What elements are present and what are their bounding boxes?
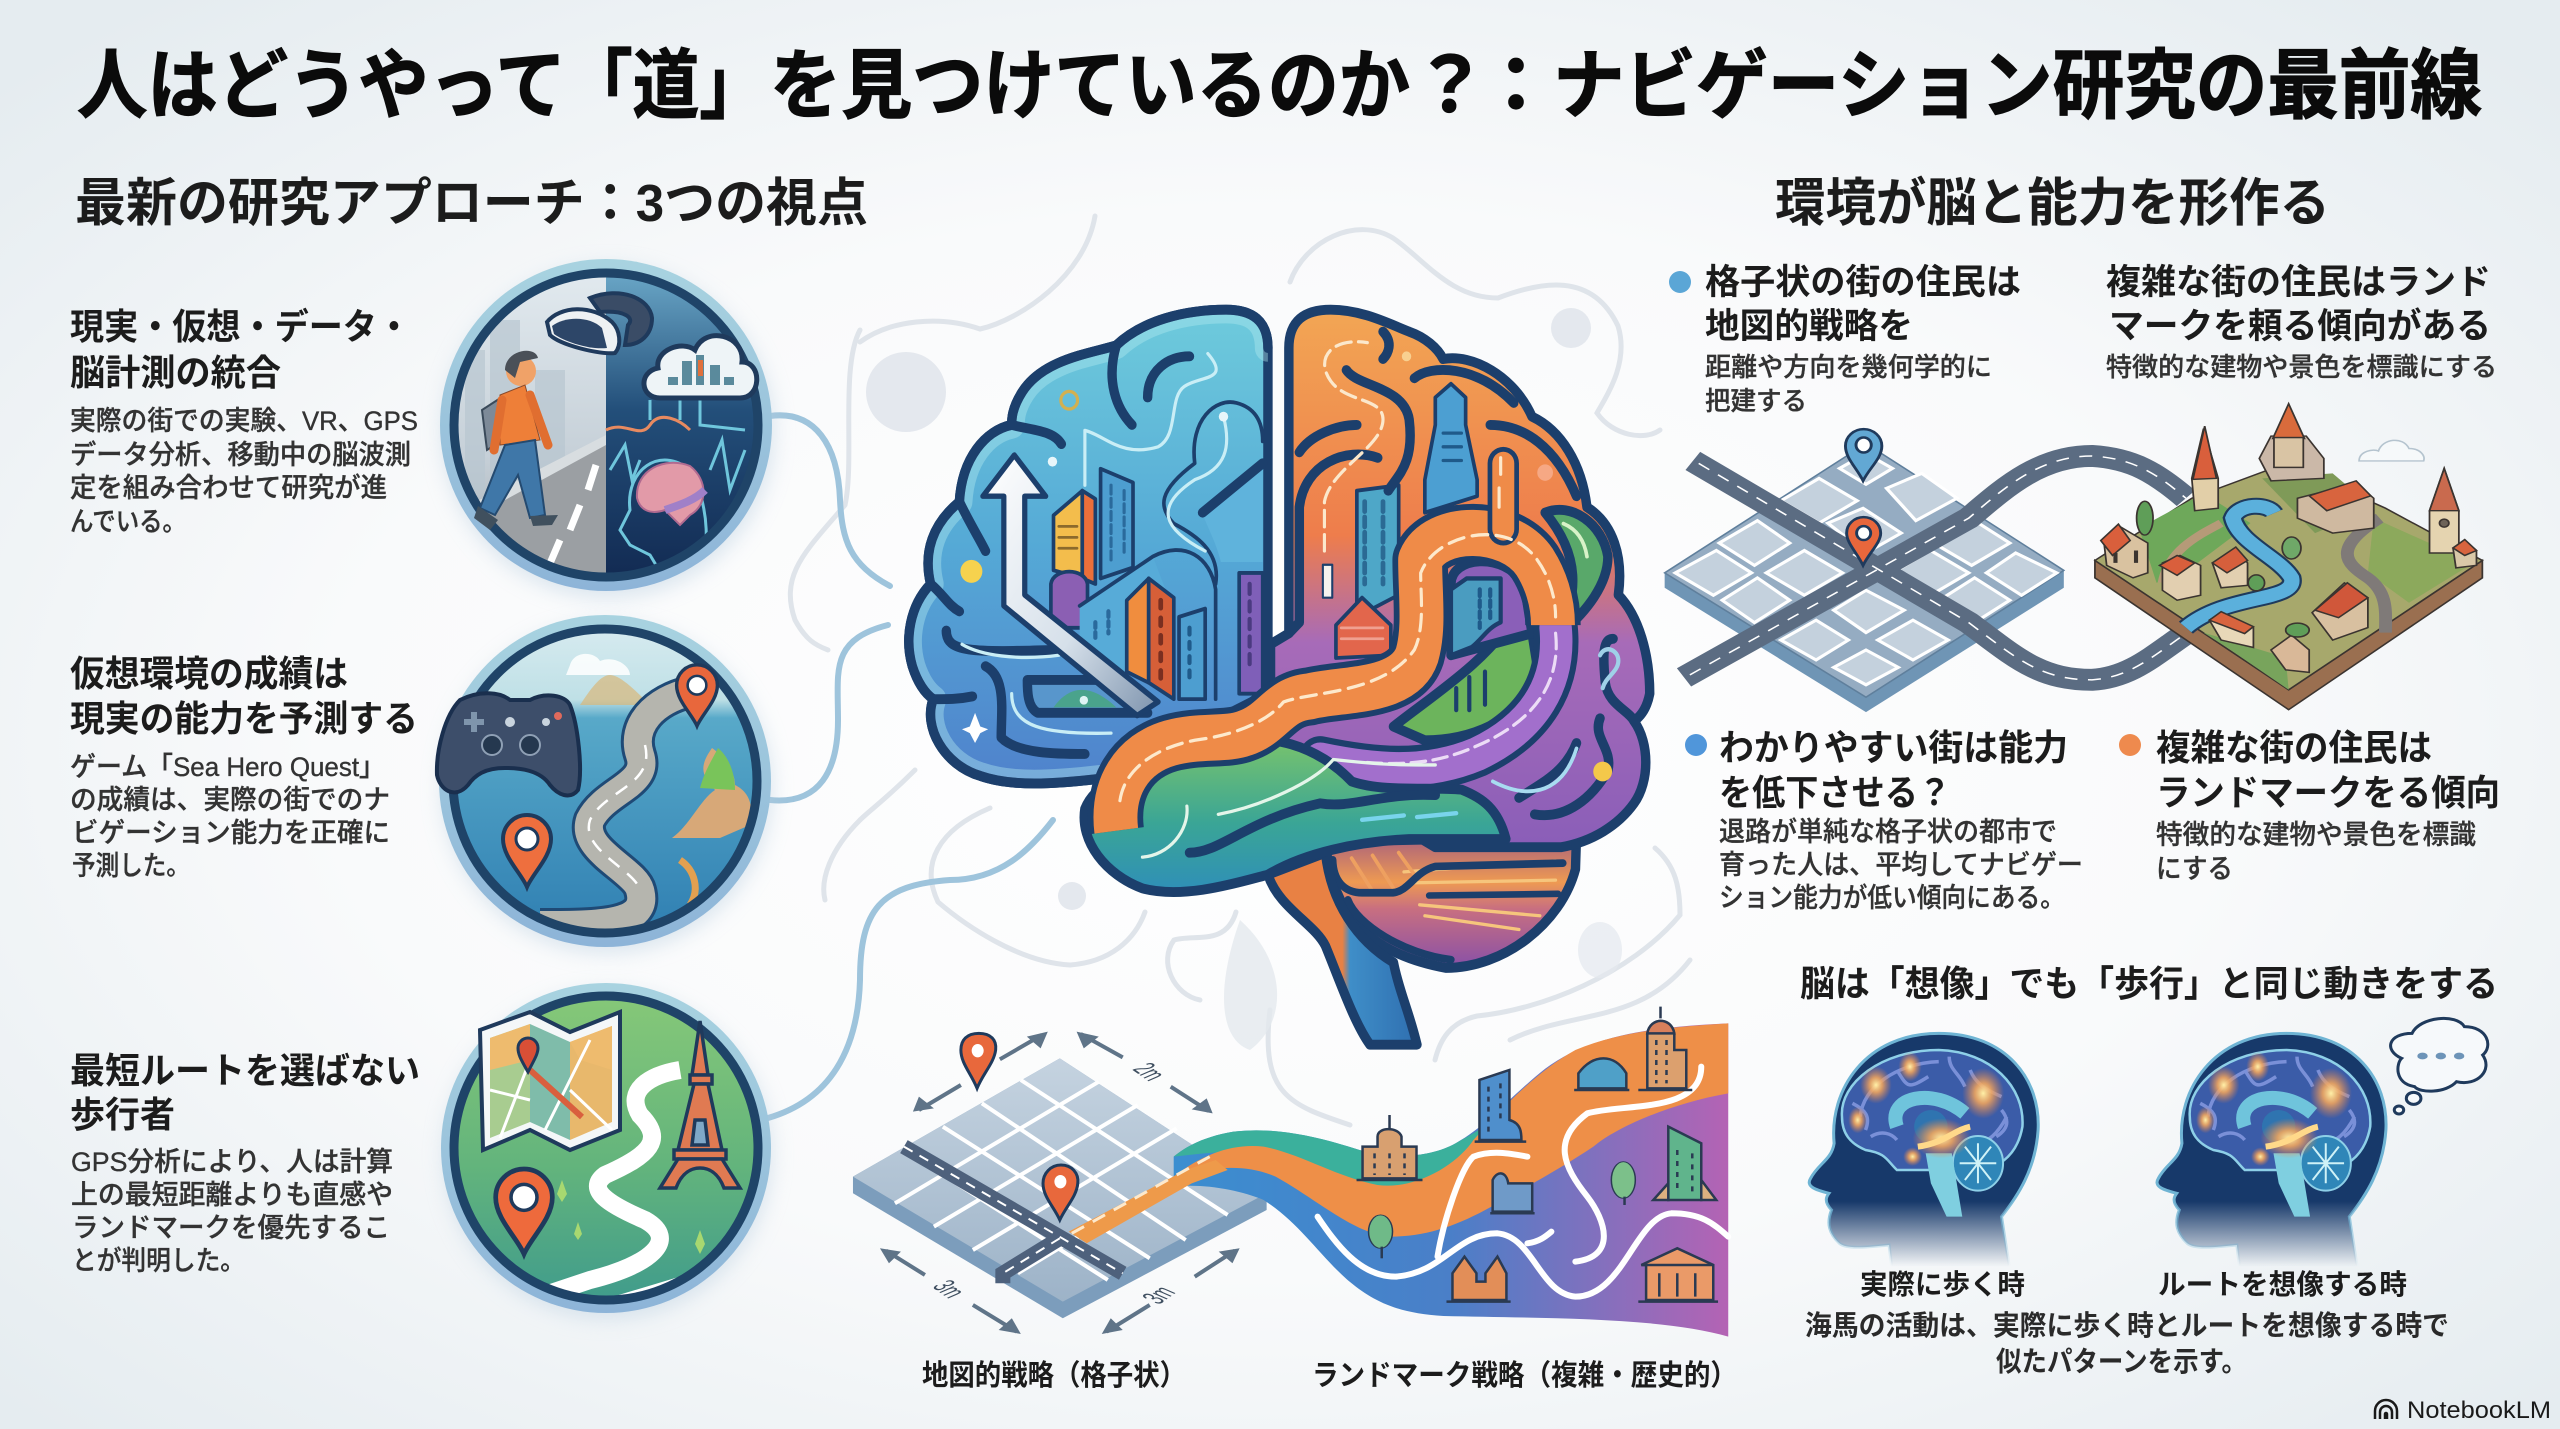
heading: environment shapes brain: 環境が脳と能力を形作る xyxy=(1775,175,2330,233)
panel: text item 3: 最短ルートを選ばない xyxy=(70,1050,420,1091)
illustration: two heads xyxy=(1809,1018,2488,1267)
title: ナビゲーション研究の最前線 xyxy=(1553,44,2482,129)
panel: right column text middle: 複雑な街の住民は xyxy=(2156,727,2432,768)
caption: landmark strategy: ランドマーク戦略（複雑・歴史的） xyxy=(1312,1359,1737,1392)
panel: text item 2: 仮想環境の成績は xyxy=(70,653,348,694)
caption: map strategy: 地図的戦略（格子状） xyxy=(922,1359,1186,1392)
panel: text item 3: とが判明した。 xyxy=(72,1246,245,1276)
panel: text item 2: 現実の能力を予測する xyxy=(70,698,418,739)
temporal lobe xyxy=(1084,740,1506,892)
icon: blue pin xyxy=(1845,429,1882,481)
title: 人はどうやって xyxy=(77,44,566,129)
roads crossing xyxy=(1684,456,2195,680)
icon: head imagining xyxy=(2157,1033,2386,1267)
icon: VR headset xyxy=(547,293,652,353)
panel: right column text top: 距離や方向を幾何学的に xyxy=(1705,352,1992,382)
icon: map pin top xyxy=(677,665,717,726)
panel: right column text middle: ション能力が低い傾向にある。 xyxy=(1719,883,2065,913)
heading: research approach: 最新の研究アプローチ：3つの視点 xyxy=(75,175,868,233)
icon: game controller xyxy=(437,693,580,795)
icon: map pin xyxy=(496,1169,552,1254)
panel: right column text middle: を低下させる？ xyxy=(1719,772,1951,813)
illustration: central brain xyxy=(909,310,1650,1045)
icon: circle game navigation xyxy=(437,615,772,953)
panel: right column text middle: わかりやすい街は能力 xyxy=(1719,727,2068,768)
panel: right column text middle xyxy=(1685,727,2500,913)
connector lines from circles to brain xyxy=(768,415,1053,1118)
icon: circle real virtual data brain xyxy=(440,259,774,598)
panel: right column text middle: にする xyxy=(2156,854,2233,884)
grid city xyxy=(1665,444,2064,712)
icon: small cloud xyxy=(2359,440,2424,461)
left hemisphere gyri xyxy=(931,345,1263,754)
distance labels: 3m xyxy=(926,1276,973,1302)
title: を見つけているのか xyxy=(770,44,1410,129)
panel: text item 2: ゲーム「Sea Hero Quest」 xyxy=(70,752,385,782)
panel: right column text middle: 特徴的な建物や景色を標識 xyxy=(2156,820,2476,850)
panel: text item 2: の成績は、実際の街でのナ xyxy=(70,785,390,815)
panel: text item 1: データ分析、移動中の脳波測 xyxy=(70,440,411,470)
panel: right column text top: 格子状の街の住民は xyxy=(1705,263,2021,302)
panel: text item 3: 歩行者 xyxy=(70,1094,175,1135)
icon: pins on grid xyxy=(961,1033,1078,1220)
left outline again xyxy=(909,310,1268,783)
panel: text item 1: んでいる。 xyxy=(70,507,186,537)
panel: text item 1: 現実・仮想・データ・ xyxy=(70,306,411,347)
icon: head walking xyxy=(1809,1033,2038,1267)
inner green city xyxy=(1393,617,1540,740)
title: ： xyxy=(1478,44,1554,129)
dimension arrows xyxy=(880,1032,1240,1334)
right hemisphere buildings xyxy=(1323,384,1477,658)
panel: right column text top: 特徴的な建物や景色を標識にする xyxy=(2106,352,2497,382)
decorative background curves xyxy=(790,216,1690,1125)
icon: folded map xyxy=(480,1012,620,1150)
panel: right column text top: 複雑な街の住民はランド xyxy=(2106,263,2491,302)
title: ？ xyxy=(1412,44,1488,129)
panel: text item 3: ランドマークを優先するこ xyxy=(72,1213,390,1243)
panel: text item 2: 予測した。 xyxy=(72,851,190,881)
panel: text item 2 xyxy=(70,653,418,881)
panel: right column text top: 地図的戦略を xyxy=(1705,307,1913,346)
bullet xyxy=(1685,734,1707,756)
panel: text item 1: 脳計測の統合 xyxy=(70,352,281,393)
distance labels: 2m xyxy=(1126,1059,1173,1084)
panel: text item 1: 定を組み合わせて研究が進 xyxy=(70,473,387,503)
panel: text item 1 xyxy=(70,306,418,537)
left hemisphere inner highlight xyxy=(909,310,1268,783)
text block: hippocampus: 海馬の活動は、実際に歩く時とルートを想像する時で xyxy=(1805,1310,2449,1341)
illustration: grid city to complex village xyxy=(1665,404,2482,712)
distance labels xyxy=(926,1059,1182,1307)
heading: imagining and walking: 脳は「想像」でも「歩行」と同じ動きをする xyxy=(1800,963,2498,1004)
right hemisphere xyxy=(1271,310,1650,847)
icon: orange pin xyxy=(1847,517,1881,565)
caption: imagining: ルートを想像する時 xyxy=(2158,1269,2407,1300)
icon: white arrow up xyxy=(983,455,1158,716)
panel: right column text top: 把建する xyxy=(1705,386,1807,416)
ribbon road xyxy=(1069,1023,1728,1337)
panel: right column text middle: 育った人は、平均してナビゲー xyxy=(1719,850,2083,880)
panel: right column text middle: ランドマークをる傾向 xyxy=(2156,772,2500,813)
thick road on grid xyxy=(904,1147,1123,1283)
icon: thought bubble xyxy=(2391,1018,2488,1114)
panel: text item 3: 上の最短距離よりも直感や xyxy=(71,1180,393,1210)
bullet xyxy=(2119,734,2141,756)
brainstem xyxy=(1268,853,1417,1045)
icon: data cloud xyxy=(644,336,757,398)
panel: right column text top xyxy=(1669,263,2497,416)
orange main road xyxy=(1115,533,1553,831)
panel: text item 1: 実際の街での実験、VR、GPS xyxy=(70,406,418,436)
purple road xyxy=(1320,628,1556,769)
panel: text item 2: ビゲーション能力を正確に xyxy=(72,818,390,848)
right hemisphere gyri and road xyxy=(1289,332,1634,815)
title: 「道」 xyxy=(566,44,766,129)
panel: text item 3 xyxy=(70,1050,420,1276)
panel: right column text top: マークを頼る傾向がある xyxy=(2109,307,2491,346)
buildings row xyxy=(1357,1007,1718,1302)
left hemisphere buildings xyxy=(1051,402,1263,699)
left thin highlight roads xyxy=(962,354,1227,733)
icon: circle shortest route xyxy=(441,983,772,1319)
icon: walking person xyxy=(474,351,558,530)
left hemisphere xyxy=(909,310,1268,783)
panel: right column text middle: 退路が単純な格子状の都市で xyxy=(1719,817,2057,847)
illustration: map strategy vs landmark strategy xyxy=(853,1007,1728,1337)
complex village xyxy=(2095,404,2482,710)
green leaf xyxy=(1545,510,1608,633)
distance labels: 3m xyxy=(1135,1282,1182,1307)
text block: hippocampus: 似たパターンを示す。 xyxy=(1996,1346,2247,1377)
bullet xyxy=(1669,271,1691,293)
panel: text item 3: GPS分析により、人は計算 xyxy=(71,1147,393,1177)
text block: hippocampus xyxy=(1805,1310,2449,1377)
caption: walking: 実際に歩く時 xyxy=(1860,1269,2025,1300)
grid block xyxy=(853,1058,1267,1318)
title xyxy=(77,44,2482,129)
buildings xyxy=(2192,429,2218,511)
logo: NotebookLM: NotebookLM xyxy=(2407,1397,2551,1424)
icon: map pin bottom xyxy=(503,815,551,887)
icon: tower landmark xyxy=(660,1021,740,1188)
cerebellum xyxy=(1325,836,1577,968)
